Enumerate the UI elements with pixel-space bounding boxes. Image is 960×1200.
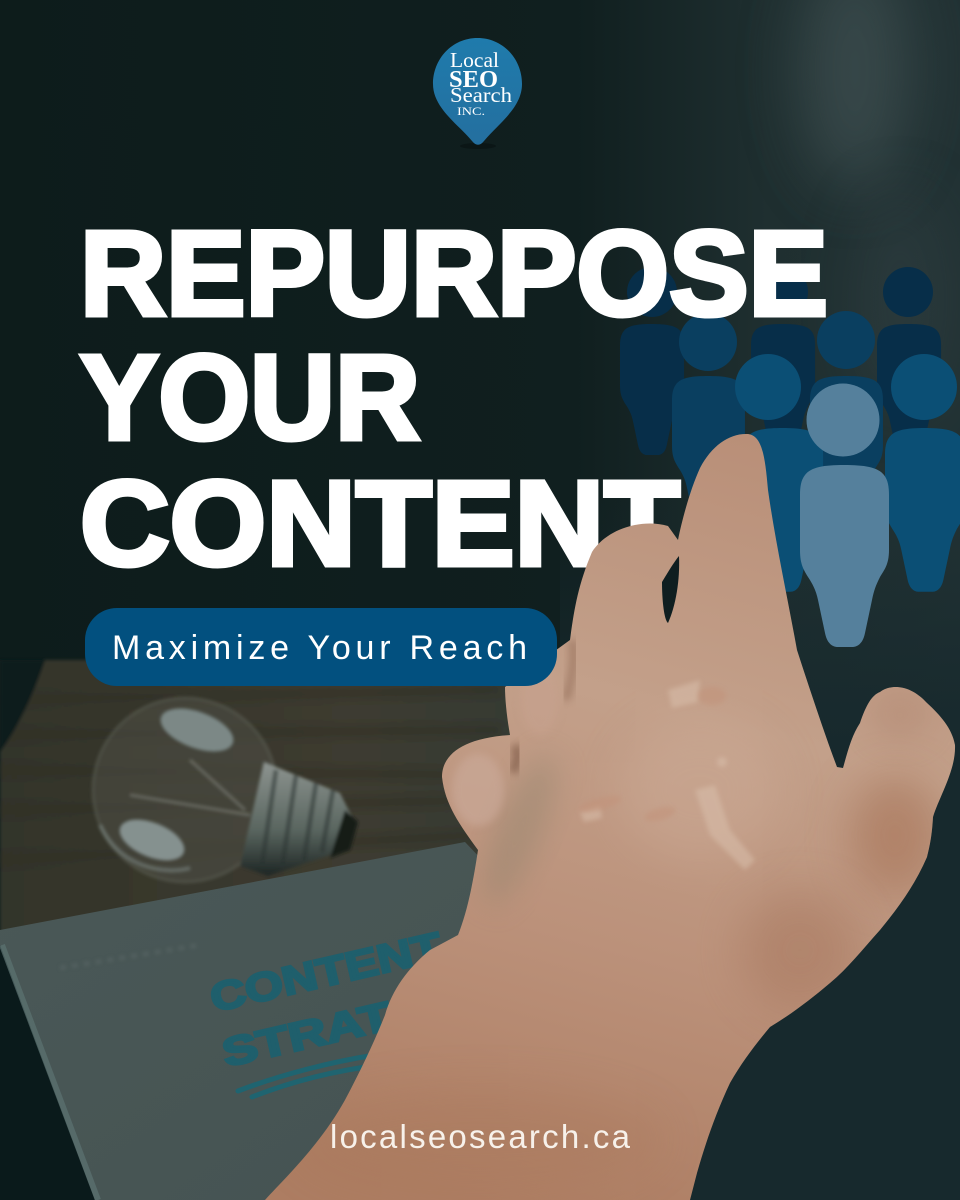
logo pin: Search	[450, 83, 513, 107]
notebook with handwriting: STRAT	[218, 994, 396, 1076]
dark area under notebook	[0, 940, 100, 1200]
website url: localseosearch.ca	[330, 1118, 631, 1155]
front row person right	[885, 354, 960, 592]
middle row person 1	[672, 313, 745, 525]
highlighted person	[800, 384, 889, 647]
title	[80, 205, 828, 591]
gap between fingers	[662, 556, 679, 623]
skin marks	[580, 680, 755, 870]
title: YOUR	[80, 329, 420, 465]
notebook with handwriting: CONTENT	[206, 925, 446, 1021]
subtitle pill: Maximize Your Reach	[112, 629, 527, 667]
people icons group	[620, 267, 960, 647]
logo pin	[433, 38, 522, 149]
title: CONTENT	[80, 455, 680, 591]
middle row person 2	[810, 311, 883, 525]
logo pin: SEO	[449, 67, 498, 93]
hand	[250, 420, 960, 1200]
light bulb	[93, 698, 358, 882]
wooden table	[0, 660, 580, 960]
back row person 1	[620, 267, 684, 455]
back row person 3	[877, 267, 941, 455]
title: REPURPOSE	[80, 205, 828, 341]
logo pin: INC.	[457, 104, 485, 118]
notebook with handwriting	[0, 842, 520, 1200]
hand shading	[850, 775, 940, 895]
subtitle pill	[85, 608, 557, 686]
front row person left	[735, 354, 823, 592]
logo pin: Local	[450, 48, 499, 72]
back row person 2	[751, 267, 815, 455]
